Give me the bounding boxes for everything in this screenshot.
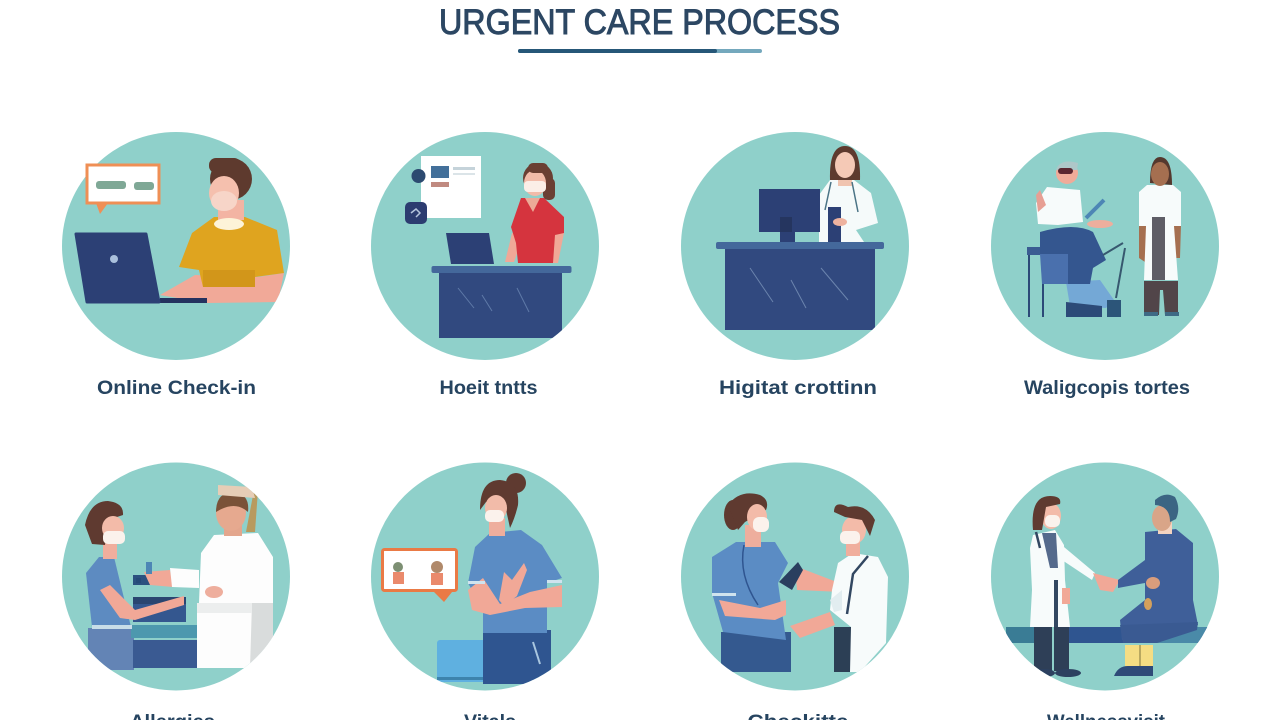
- panel: eighth step: [991, 462, 1219, 690]
- illustration: reception desk: [405, 156, 572, 338]
- panel: vitals: [371, 462, 599, 690]
- title underline: [518, 49, 762, 53]
- panel: seventh step: [681, 462, 909, 690]
- panel: second step: [371, 132, 599, 360]
- panel: third step: [681, 132, 909, 360]
- illustration: doctor shaking hands with patient on bench: [1006, 495, 1208, 677]
- label: third step: Higitat crottinn: [719, 378, 877, 399]
- illustration: patient with crossed arms: [437, 473, 562, 684]
- illustration: doctor at computer desk: [716, 146, 884, 330]
- title: URGENT CARE PROCESS: [439, 3, 840, 42]
- panel: fourth step: [991, 132, 1219, 360]
- illustration: patient on stool with clinician: [1027, 157, 1181, 317]
- icon: video call bubble: [382, 550, 456, 602]
- illustration: blood pressure check: [712, 493, 888, 672]
- panel: fifth step: [62, 462, 290, 690]
- panel: online check-in: [62, 132, 290, 360]
- illustration: nurse and doctor at counter: [85, 485, 273, 670]
- label: second step: Hoeit tntts: [440, 378, 538, 399]
- label: online check-in: Online Check-in: [97, 378, 256, 399]
- label: fourth step: Waligcopis tortes: [1024, 378, 1190, 399]
- illustration: patient at laptop: [76, 158, 284, 303]
- icon: speech bubble: [87, 165, 159, 214]
